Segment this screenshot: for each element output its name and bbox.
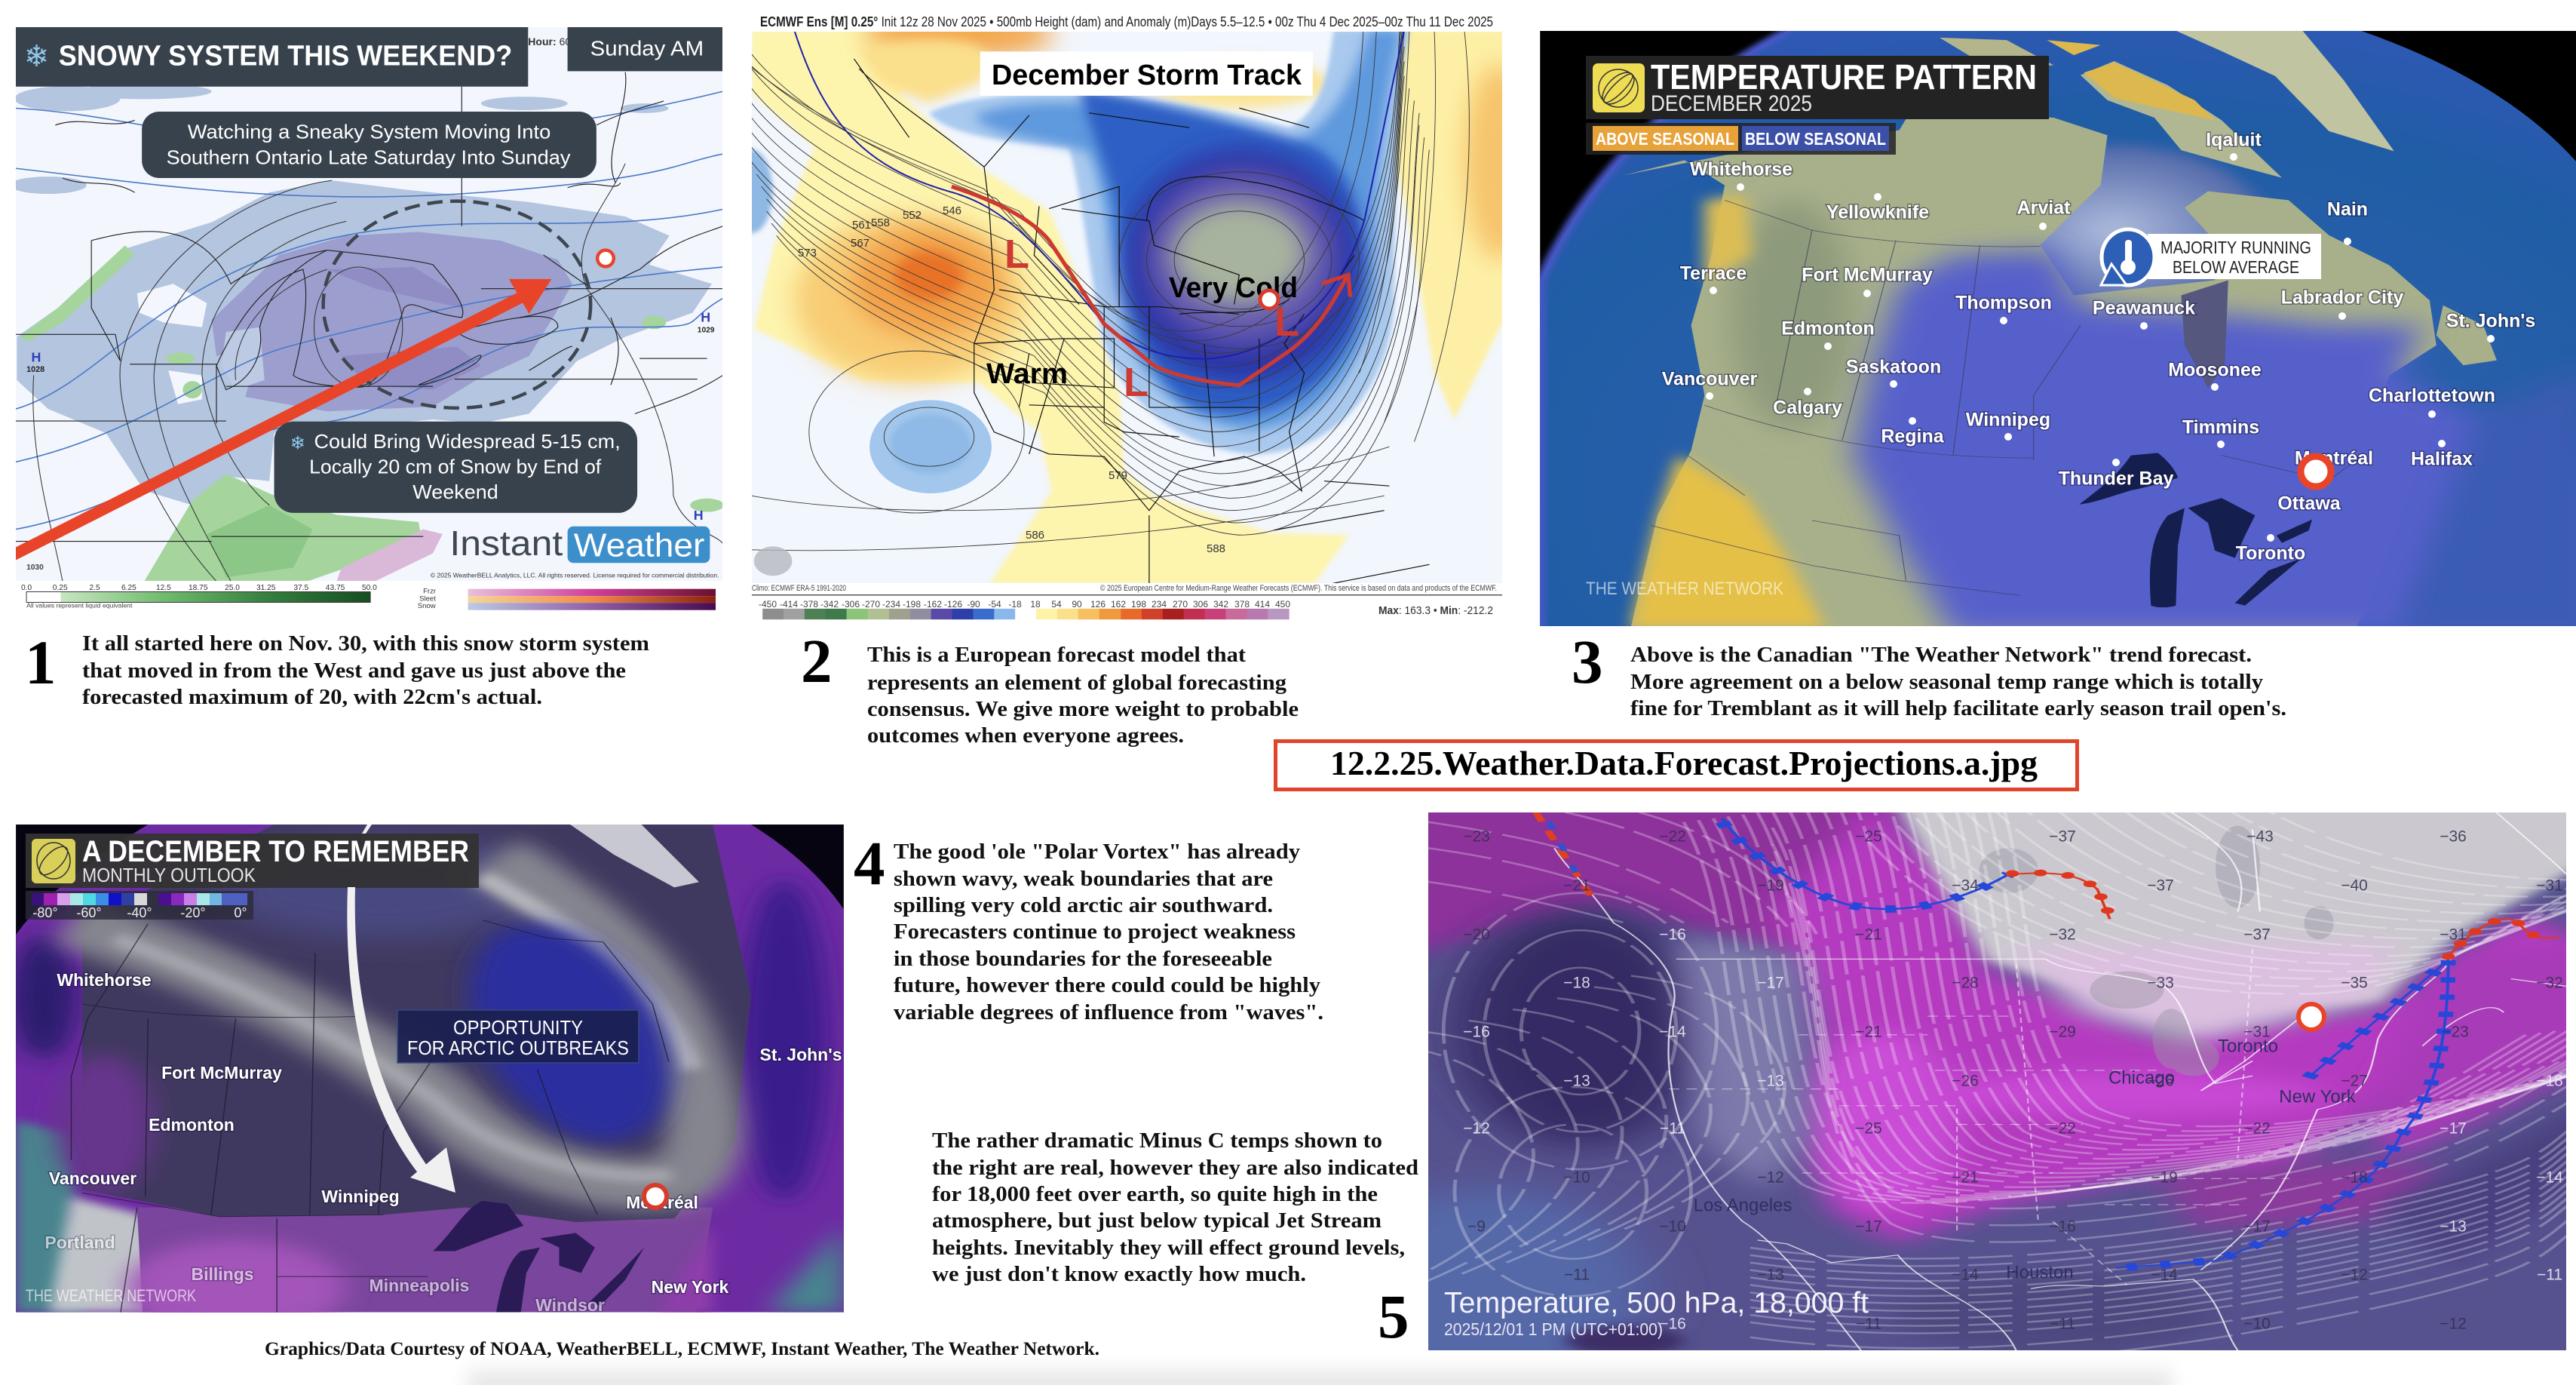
high pressure labels [26,310,715,572]
temperature grid numbers: −35 [2341,975,2368,992]
colour bar ticks: -378 [800,599,818,610]
callout: snowfall amounts [274,422,637,513]
temperature grid numbers: −37 [2049,828,2076,846]
city labels: Winnipeg [1966,410,2050,431]
temperature grid numbers: −36 [2440,828,2467,846]
temperature grid numbers: −19 [2151,1169,2178,1187]
location marker [2301,456,2331,487]
city labels: Fort McMurray [161,1063,282,1083]
temperature grid numbers: −14 [1952,1267,1979,1284]
temperature scale: -40° [127,905,152,920]
temperature grid numbers: −22 [2243,1120,2271,1138]
panel 1 legend: 43.75 [326,584,345,592]
colour bar ticks: -162 [924,599,942,610]
text block 2: outcomes when everyone agrees. [867,723,1184,748]
weather fronts [1536,812,2559,1268]
title block [26,834,479,888]
city labels: Charlottetown [2369,385,2495,407]
map labels: 567 [851,237,869,250]
panel 1: snowy system map [0,17,725,582]
snowfall map artwork: © 2025 WeatherBELL Analytics, LLC. All rights reserved. License required for commercial distribution. [431,572,719,579]
logo: Instant Weather [449,524,710,564]
temperature grid numbers: −32 [2536,975,2563,992]
colour bar ticks [759,599,1290,610]
temperature scale: -60° [76,905,102,920]
colour bar ticks: 270 [1173,599,1188,610]
title block: A DECEMBER TO REMEMBER [82,835,469,868]
temperature grid numbers: −14 [2536,1169,2563,1187]
temperature grid numbers: −21 [1855,926,1882,944]
temperature grid numbers: −11 [2537,1267,2562,1284]
panel 1 legend: 25.0 [225,584,240,592]
city labels: Moosonee [2168,360,2262,381]
colour bar ticks: 162 [1111,599,1126,610]
panel 1 legend: Frzr [423,587,437,595]
red track arrow [0,279,552,563]
temperature grid numbers: −26 [1952,1073,1979,1090]
text block 1 [25,628,649,709]
layer caption [1444,1287,1869,1339]
panel 1 legend: 12.5 [156,584,171,592]
callout: snowfall amounts: Weekend [412,481,498,503]
city labels: Timmins [2182,417,2259,438]
colour bar ticks: -450 [759,599,777,610]
text block 2: consensus. We give more weight to probable [867,697,1299,721]
city labels: New York [652,1277,729,1297]
WeatherBELL swirl [754,546,792,576]
callout: below average [2101,229,2321,285]
map labels: L [1124,360,1148,405]
temperature grid numbers: −17 [2440,1120,2467,1138]
panel 1 legend: Sleet [419,595,436,603]
colour bar ticks: 18 [1030,599,1041,610]
temperature grid numbers: −40 [2341,877,2368,895]
city labels: Regina [1881,426,1945,447]
model header: ECMWF Ens [M] 0.25° Init 12z 28 Nov 2025 • 500mb Height (dam) and Anomaly (m)Days 5.5–12.5 • 00z Thu 4 Dec 2025–00z Thu 11 Dec 2025 [760,14,1493,29]
high pressure labels: 1028 [26,365,44,374]
temperature grid numbers: −34 [1952,877,1979,895]
text block 3 [1572,627,2286,720]
panel 1 legend: All values represent liquid equivalent [26,602,133,610]
city labels: Whitehorse [57,970,152,990]
temperature scale: -20° [180,905,206,920]
text block 3: 3 [1572,627,1603,696]
temperature grid numbers: −16 [2049,1218,2076,1236]
city labels: Terrace [1680,263,1746,284]
text block 4: The good 'ole "Polar Vortex" has already [894,840,1301,864]
callout: arctic outbreaks [397,1010,639,1063]
temperature grid numbers: −29 [2049,1024,2076,1041]
dashed focus circle [324,201,590,408]
city labels: Portland [44,1233,115,1252]
high pressure labels: H [701,310,710,325]
temperature grid numbers: −21 [1563,877,1590,895]
white title backing [980,51,1313,96]
temperature grid numbers: −17 [1757,975,1784,992]
temperature grid numbers: −22 [1659,828,1686,846]
temperature grid numbers: −10 [2243,1316,2271,1333]
panel 3: temperature pattern map [1540,30,2576,635]
colour bar ticks: -54 [988,599,1001,610]
title block: DECEMBER 2025 [1651,91,1812,116]
map labels: Very Cold [1169,272,1298,304]
text block 1: forecasted maximum of 20, with 22cm's actual. [82,685,542,709]
text block 5: atmosphere, but just below typical Jet Stream [932,1208,1382,1233]
text block 5: the right are real, however they are also indicated [932,1156,1418,1180]
callout: sneaky system: Southern Ontario Late Saturday Into Sunday [167,146,571,168]
panel 1 legend: 18.75 [189,584,208,592]
colour bar ticks: 54 [1051,599,1062,610]
text block 4: shown wavy, weak boundaries that are [894,867,1273,891]
text block 4: 4 [854,828,885,898]
temperature grid numbers: −16 [1463,1024,1490,1041]
colour bar ticks: -234 [882,599,900,610]
title bar: ❄ [24,39,49,74]
snowfall map artwork [0,17,725,582]
callout: below average: MAJORITY RUNNING [2160,238,2311,257]
title bar [11,27,528,87]
city labels: Arviat [2017,198,2071,219]
city labels: Vancouver [49,1168,136,1188]
text block 3: fine for Tremblant as it will help facilitate early season trail open's. [1630,696,2286,720]
temperature grid numbers: −25 [1855,1120,1882,1138]
city labels: Iqaluit [2206,130,2262,151]
temperature grid numbers: −11 [2050,1316,2075,1333]
high pressure labels: 1029 [698,327,715,335]
map city labels: Chicago [2108,1067,2175,1088]
filename box: 12.2.25.Weather.Data.Forecast.Projections.a.jpg [1330,744,2038,782]
snowfall map artwork: Hour: 60 [528,35,571,48]
city labels: Yellowknife [1826,202,1929,223]
map labels: Warm [986,358,1068,390]
text block 2: represents an element of global forecasting [867,671,1287,695]
high pressure labels: H [694,508,704,523]
high pressure labels: H [31,350,41,365]
temperature grid numbers: −18 [2536,1073,2563,1090]
map city labels: Toronto [2218,1036,2278,1056]
temperature grid numbers: −18 [1563,975,1590,992]
location marker [597,250,614,266]
text block 5: for 18,000 feet over earth, so quite high in the [932,1182,1378,1206]
colour bar ticks: -90 [967,599,980,610]
temperature grid numbers: −26 [2147,1073,2174,1090]
colour bar ticks: -306 [842,599,860,610]
text block 5: 5 [1378,1282,1409,1351]
legend [1586,123,1896,155]
city labels: Peawanuck [2093,298,2195,319]
city labels: Toronto [2236,543,2305,564]
temperature grid numbers: −13 [1757,1073,1784,1090]
map labels: 546 [943,204,961,217]
temperature grid numbers: −37 [2147,877,2174,895]
title bar: SNOWY SYSTEM THIS WEEKEND? [59,40,512,72]
colour bar ticks: 234 [1152,599,1167,610]
map city labels: New York [2279,1086,2357,1107]
text block 3: Above is the Canadian "The Weather Network" trend forecast. [1630,643,2252,667]
panel 1 legend: Snow [418,602,436,610]
text block 1: 1 [25,628,56,697]
panel 1 legend: 50.0 [362,584,377,592]
outlook artwork [11,825,844,1334]
storm track line [952,186,1351,385]
layer caption: 2025/12/01 1 PM (UTC+01:00) [1444,1319,1663,1339]
temperature grid numbers: −11 [1564,1267,1590,1284]
panel 1 legend: 2.5 [90,584,100,592]
text block 5 [932,1129,1418,1351]
temperature grid numbers: −32 [2049,926,2076,944]
city labels: Montréal [626,1193,698,1212]
temperature grid numbers: −14 [2151,1267,2178,1284]
map labels: 573 [798,247,817,259]
temperature grid numbers: −10 [1659,1218,1686,1236]
text block 2: 2 [801,626,833,696]
panel 1 legend [21,584,716,610]
callout: snowfall amounts: Could Bring Widespread 5-15 cm, [314,430,621,453]
max min readout: Max: 163.3 • Min: -212.2 [1378,604,1493,617]
temperature field artwork [1322,726,2576,1385]
temperature scale: -80° [32,905,58,920]
city labels: Windsor [535,1295,605,1315]
city labels: Minneapolis [370,1276,469,1295]
text block 4: Forecasters continue to project weakness [894,920,1296,944]
city labels: Edmonton [1781,318,1875,339]
map city labels: Los Angeles [1694,1195,1792,1215]
panel 1 legend: 6.25 [121,584,136,592]
city labels: Fort McMurray [1802,265,1933,286]
map labels [752,60,1502,596]
temperature grid numbers: −13 [2440,1218,2467,1236]
map labels: Climo: ECMWF ERA-5 1991-2020 [752,584,846,593]
temperature grid numbers: −11 [1856,1316,1881,1333]
temperature grid numbers: −13 [1563,1073,1590,1090]
text block 4: future, however there could could be highly [894,973,1321,997]
city labels [1662,130,2535,564]
city labels: Thompson [1955,293,2052,314]
colour bar ticks: -342 [820,599,839,610]
legend: BELOW SEASONAL [1745,129,1886,149]
temperature grid numbers: −13 [1757,1267,1784,1284]
temperature grid numbers: −22 [2049,1120,2076,1138]
colour bar ticks: 414 [1255,599,1270,610]
map labels: L [1274,299,1299,345]
city labels: Montréal [2295,448,2373,469]
colour bar ticks: -270 [862,599,880,610]
temperature grid numbers: −11 [1660,1120,1685,1138]
city labels: Labrador City [2281,287,2403,309]
temperature grid numbers: −16 [1659,1316,1686,1333]
credits line: Graphics/Data Courtesy of NOAA, WeatherBELL, ECMWF, Instant Weather, The Weather Network. [265,1339,1099,1359]
city labels: Billings [191,1264,254,1284]
map labels: L [1004,232,1029,277]
temperature grid numbers: −20 [1463,926,1490,944]
temperature grid numbers: −25 [1855,828,1882,846]
text block 5: heights. Inevitably they will effect ground levels, [932,1236,1405,1260]
map labels: © 2025 European Centre for Medium-Range Weather Forecasts (ECMWF). This service is based on data and products of the ECMWF. [1100,584,1497,593]
temperature grid numbers: −10 [1563,1169,1590,1187]
temperature grid numbers: −21 [1952,1169,1979,1187]
location marker [2298,1004,2324,1030]
city labels: Calgary [1773,398,1842,419]
panel 2: ECMWF storm track map [716,0,1535,619]
temperature grid numbers: −21 [1855,1024,1882,1041]
city labels: Ottawa [2277,493,2341,514]
temperature grid numbers: −37 [2243,926,2271,944]
temperature grid numbers: −31 [2536,877,2563,895]
colour bar ticks: -414 [780,599,798,610]
anomaly colour bar [762,609,1290,619]
colour bar ticks: -126 [944,599,962,610]
text block 3: More agreement on a below seasonal temp range which is totally [1630,670,2264,694]
temperature grid numbers: −27 [2341,1073,2368,1090]
temperature grid numbers: −12 [1757,1169,1784,1187]
colour bar ticks: 378 [1234,599,1250,610]
globe artwork [1540,30,2576,635]
temperature grid numbers: −31 [2243,1024,2271,1041]
text block 5: The rather dramatic Minus C temps shown to [932,1129,1382,1153]
callout: arctic outbreaks: OPPORTUNITY [453,1016,583,1039]
bottom page shadow [468,1370,2172,1385]
panel 5: 500 hPa temperature map [1322,726,2576,1385]
callout: snowfall amounts: Locally 20 cm of Snow by End of [309,456,602,478]
text block 4: spilling very cold arctic air southward. [894,893,1273,917]
colour bar ticks: 198 [1131,599,1146,610]
legend: ABOVE SEASONAL [1596,129,1734,149]
temperature grid numbers: −16 [1659,926,1686,944]
city labels [44,970,842,1315]
callout: sneaky system [142,112,596,178]
broadcaster watermark: THE WEATHER NETWORK [26,1286,196,1305]
map labels: 558 [871,217,890,229]
broadcaster watermark: THE WEATHER NETWORK [1586,579,1783,599]
temperature scale [26,891,253,920]
temperature grid numbers: −23 [2442,1024,2469,1041]
city labels: Saskatoon [1846,357,1941,378]
temperature grid numbers: −43 [2246,828,2274,846]
streamlines [1373,726,2576,1363]
text block 4 [854,828,1323,1024]
colour bar ticks: 90 [1072,599,1082,610]
map labels: 561 [852,219,871,232]
temperature grid numbers: −17 [2243,1218,2271,1236]
location marker [644,1185,667,1208]
anomaly map [716,0,1535,584]
callout: sneaky system: Watching a Sneaky System Moving Into [188,121,550,143]
colour bar ticks: -198 [903,599,921,610]
temperature grid numbers: −14 [1659,1024,1686,1041]
city labels: Winnipeg [321,1187,400,1206]
panel 1 legend: 37.5 [293,584,309,592]
city labels: Whitehorse [1690,159,1792,180]
logo: Instant Weather: Instant [449,524,563,563]
temperature grid numbers: −9 [1467,1218,1486,1236]
map labels: 579 [1109,469,1127,482]
title block: MONTHLY OUTLOOK [82,864,256,886]
panel 1 legend: 31.25 [256,584,276,592]
temperature grid numbers: −17 [1855,1218,1882,1236]
temperature scale: 0° [234,905,247,920]
callout: arctic outbreaks: FOR ARCTIC OUTBREAKS [407,1036,629,1059]
colour bar ticks: 342 [1213,599,1228,610]
callout: below average: BELOW AVERAGE [2173,257,2299,277]
city labels: Nain [2327,199,2368,220]
map city labels [1694,1036,2357,1282]
map labels: 552 [903,209,922,222]
colour bar ticks: 450 [1275,599,1290,610]
text block 1: that moved in from the West and gave us just above the [82,659,626,683]
city labels: Vancouver [1662,369,1757,390]
temperature grid numbers: −19 [1757,877,1784,895]
map labels: December Storm Track [992,60,1302,91]
temperature grid numbers: −23 [1463,828,1490,846]
temperature grid numbers: −12 [1463,1120,1490,1138]
panel 1 legend: 0.25 [53,584,68,592]
map labels: 586 [1026,529,1044,542]
callout: snowfall amounts: ❄ [290,433,305,454]
map labels: 588 [1207,542,1225,555]
time tag: Sunday AM [590,36,704,60]
temperature grid numbers: −18 [2341,1169,2368,1187]
city dots [1706,153,2495,542]
text block 2 [801,626,1299,748]
city labels: St. John's [760,1045,842,1064]
colour bar ticks: 306 [1193,599,1208,610]
panel 1 legend: 0.0 [21,584,32,592]
layer caption: Temperature, 500 hPa, 18,000 ft [1444,1287,1869,1319]
arrow: cold air plunge [347,825,455,1193]
title block: TEMPERATURE PATTERN [1651,57,2037,97]
city labels: Halifax [2411,449,2473,470]
city labels: St. John's [2446,311,2535,332]
text block 2: This is a European forecast model that [867,643,1246,667]
panel 4: December to remember map [11,825,844,1334]
coast and border lines [1554,812,2566,1350]
text block 1: It all started here on Nov. 30, with this snow storm system [82,631,649,656]
temperature grid numbers: −31 [2440,926,2467,944]
temperature grid numbers [1463,828,2563,1333]
text block 4: variable degrees of influence from "waves". [894,1000,1323,1024]
title block [1586,56,2049,119]
colour bar ticks: -18 [1008,599,1022,610]
logo: Instant Weather: Weather [574,527,704,564]
high pressure labels: 1030 [26,564,44,572]
time tag [568,27,725,71]
city labels: Edmonton [149,1115,235,1135]
temperature grid numbers: −33 [2147,975,2174,992]
map city labels: Houston [2006,1262,2074,1282]
temperature grid numbers: −12 [2341,1267,2368,1284]
temperature grid numbers: −12 [2440,1316,2467,1333]
colour bar ticks: 126 [1090,599,1106,610]
city labels: Thunder Bay [2059,468,2173,490]
text block 5: we just don't know exactly how much. [932,1262,1306,1286]
temperature grid numbers: −28 [1952,975,1979,992]
text block 4: in those boundaries for the foreseeable [894,947,1272,971]
